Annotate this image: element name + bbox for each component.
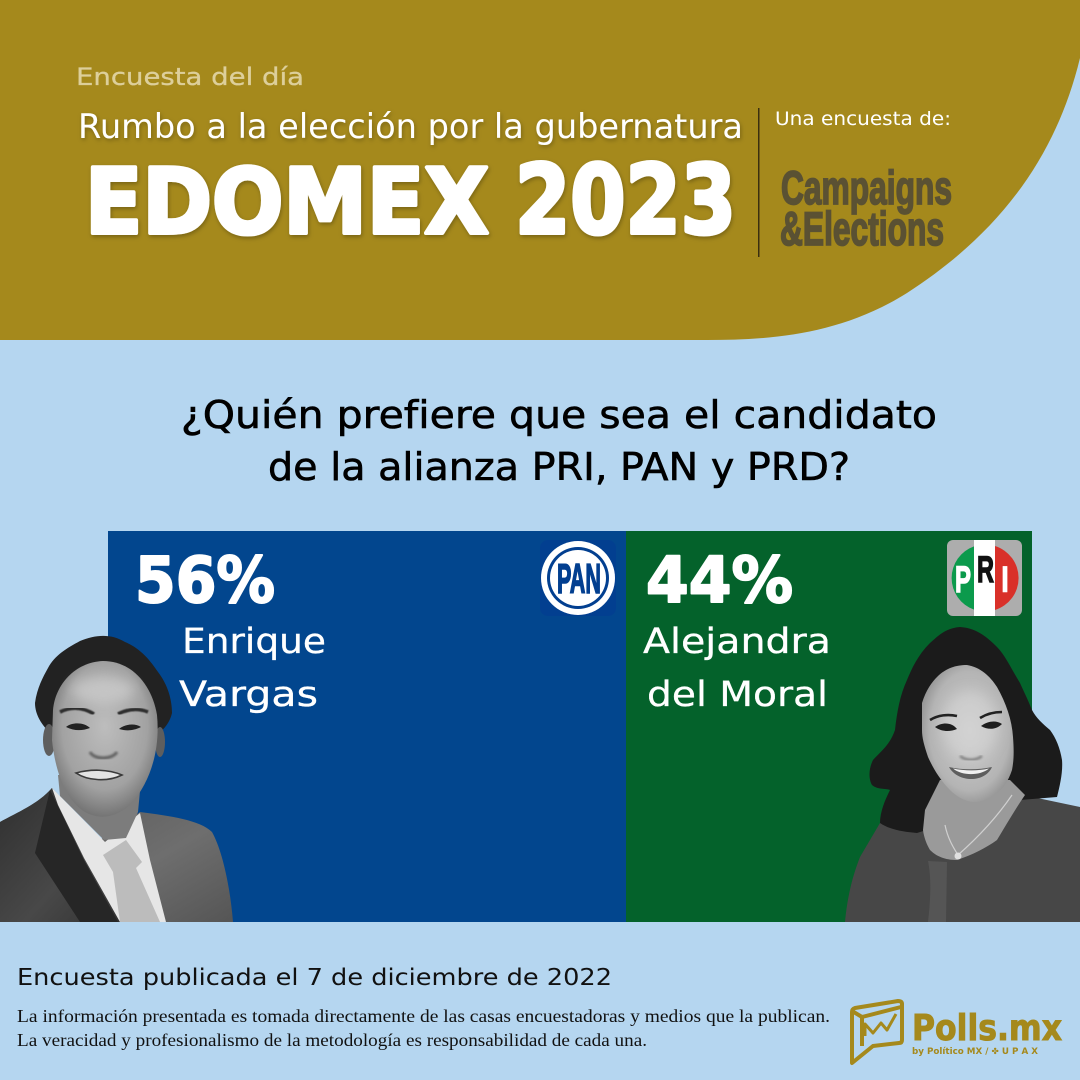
- logo: Polls.mx: [852, 1001, 1062, 1063]
- jacket left panel: [0, 788, 120, 922]
- main title: [85, 146, 736, 256]
- footer disclaimer: La veracidad y profesionalismo de la metodología es responsabilidad de cada una.: [17, 1030, 647, 1050]
- nose: [960, 756, 982, 760]
- icon: PRI logo: P: [955, 559, 971, 600]
- logo: Campaigns & Elections: [780, 161, 952, 255]
- question heading: [181, 393, 937, 490]
- pendant: [954, 852, 962, 860]
- footer disclaimer: La información presentada es tomada directamente de las casas encuestadoras y medios que la publican.: [17, 1006, 830, 1026]
- brows: [930, 712, 1002, 720]
- wordmark: Polls.mx: [912, 1008, 1062, 1049]
- bar chart: [108, 531, 1032, 922]
- label: Alejandra del Moral: del Moral: [647, 675, 828, 715]
- mouth: [949, 767, 992, 779]
- portrait: Enrique Vargas: [0, 636, 233, 922]
- icon: PRI logo: I: [1001, 559, 1009, 600]
- face: [922, 665, 1014, 802]
- mouth: [76, 770, 122, 780]
- hair: [870, 627, 1062, 833]
- placket: [928, 861, 947, 922]
- right ear: [155, 727, 165, 757]
- question heading: ¿Quién prefiere que sea el candidato: [181, 393, 937, 438]
- body: [845, 795, 1080, 922]
- footer date: Encuesta publicada el 7 de diciembre de 2022: [17, 963, 612, 991]
- eyes: [66, 723, 141, 730]
- icon: PRI logo: R: [977, 549, 994, 590]
- brows: [60, 708, 148, 714]
- header subtitle: Rumbo a la elección por la gubernatura: [78, 107, 743, 147]
- label: Alejandra del Moral: [643, 622, 831, 715]
- neck: [58, 770, 142, 840]
- hair: [35, 636, 172, 733]
- cheek highlight: [942, 691, 998, 759]
- header kicker: Encuesta del día: [76, 63, 304, 91]
- value: 56%: 56%: [135, 544, 275, 617]
- label: Enrique Vargas: Enrique: [182, 622, 326, 662]
- neck and chest: [923, 780, 1025, 860]
- portrait: Alejandra del Moral: [845, 627, 1080, 922]
- bar: Alejandra del Moral 44%: [626, 531, 1032, 922]
- question heading: de la alianza PRI, PAN y PRD?: [268, 445, 850, 490]
- value: 44%: 44%: [646, 544, 793, 617]
- sponsor credit: Una encuesta de:: [775, 108, 951, 130]
- icon: PAN logo: [540, 540, 616, 616]
- logo: Campaigns & Elections: Campaigns: [781, 161, 952, 214]
- main title: 2023: [515, 146, 736, 256]
- main title: EDOMEX: [85, 150, 489, 255]
- label: Alejandra del Moral: Alejandra: [643, 622, 831, 662]
- label: Enrique Vargas: [179, 622, 326, 715]
- logo: Campaigns & Elections: &Elections: [780, 202, 944, 255]
- header divider: [758, 108, 760, 257]
- header panel: [0, 0, 1080, 340]
- footer disclaimer: [17, 1006, 830, 1050]
- left ear: [43, 724, 55, 756]
- jacket: [0, 788, 233, 922]
- icon: PAN logo: PAN: [557, 555, 601, 602]
- forehead highlight: [71, 676, 135, 704]
- face: [52, 661, 158, 817]
- left lapel: [35, 790, 118, 922]
- nose: [90, 752, 117, 758]
- icon: speech bubble box: [852, 1001, 902, 1063]
- bar: Enrique Vargas 56%: [108, 531, 626, 922]
- shirt: [52, 788, 166, 922]
- tie: [103, 840, 160, 922]
- label: Enrique Vargas: Vargas: [179, 675, 318, 715]
- tagline: by Político MX / ✤ U P A X: [912, 1047, 1038, 1057]
- necklace: [945, 795, 1012, 855]
- icon: PRI logo: [947, 540, 1022, 616]
- teeth: [953, 768, 989, 774]
- eyes: [935, 722, 1002, 731]
